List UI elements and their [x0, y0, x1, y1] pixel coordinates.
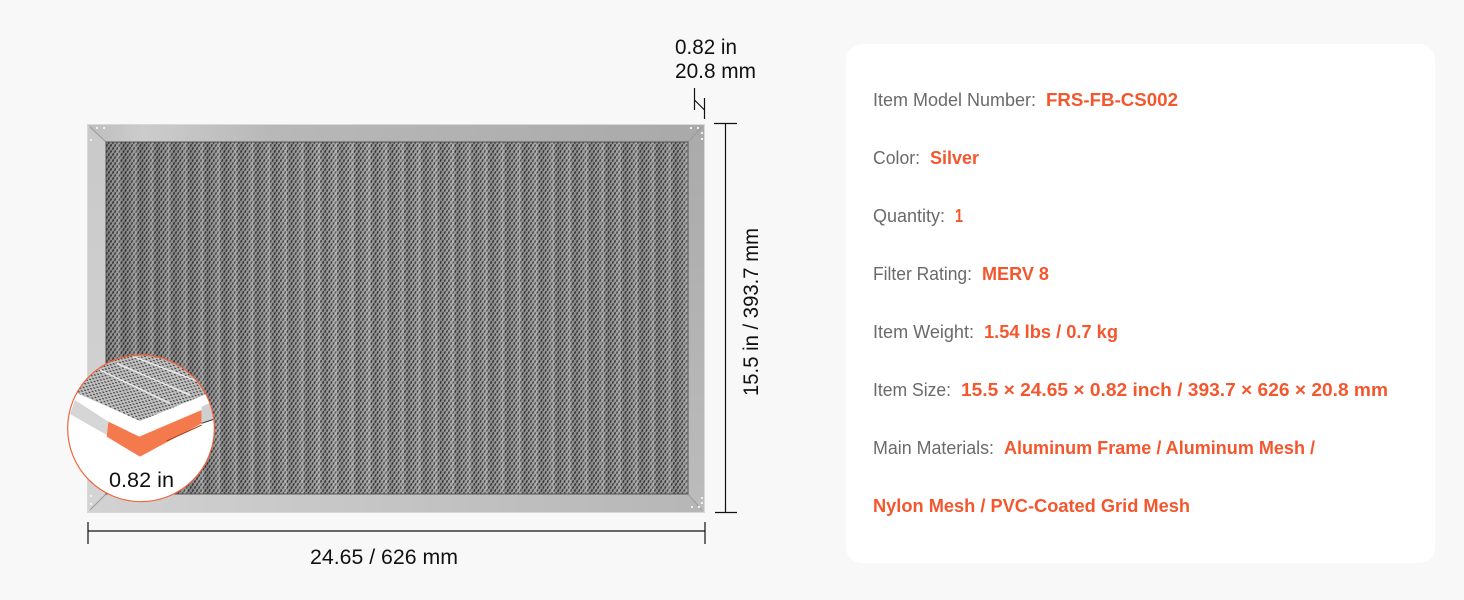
spec: model number: Item Model Number:	[873, 90, 1036, 110]
spec: filter rating: MERV 8	[982, 264, 1049, 284]
spec: color: Color:	[873, 148, 920, 168]
dimension: thickness: 0.82 in	[675, 36, 737, 59]
spec: quantity: 1	[955, 206, 963, 226]
spec: size: Item Size:	[873, 380, 951, 400]
spec: weight: 1.54 lbs / 0.7 kg	[984, 322, 1118, 342]
dimension: height: 15.5 in / 393.7 mm	[740, 228, 763, 396]
spec: filter rating	[873, 264, 1049, 284]
spec: materials: Nylon Mesh / PVC-Coated Grid Mesh	[873, 496, 1190, 516]
air filter product	[87, 124, 705, 513]
panel: specifications	[846, 44, 1435, 563]
dimension: thickness: 20.8 mm	[675, 60, 756, 83]
spec: model number	[873, 90, 1178, 110]
spec: materials: Aluminum Frame / Aluminum Mesh /	[1004, 438, 1315, 458]
spec: color	[873, 148, 979, 168]
spec: model number: FRS-FB-CS002	[1046, 90, 1178, 110]
zoom callout: frame thickness	[67, 340, 217, 502]
callout label: 0.82 in	[109, 469, 174, 492]
spec: weight: Item Weight:	[873, 322, 974, 342]
spec: color: Silver	[930, 148, 979, 168]
spec: quantity: Quantity:	[873, 206, 945, 226]
spec: materials: Main Materials:	[873, 438, 994, 458]
spec: filter rating: Filter Rating:	[873, 264, 972, 284]
spec: materials	[873, 438, 1315, 516]
dimension: width	[88, 522, 705, 569]
aluminum frame	[87, 124, 705, 513]
dimension: height	[714, 124, 763, 512]
dimension: width: 24.65 / 626 mm	[310, 546, 458, 569]
dimension: thickness	[675, 36, 756, 119]
spec: weight	[873, 322, 1118, 342]
spec: size: 15.5 × 24.65 × 0.82 inch / 393.7 × 626 × 20.8 mm	[961, 380, 1388, 400]
pleated mesh	[106, 142, 688, 494]
